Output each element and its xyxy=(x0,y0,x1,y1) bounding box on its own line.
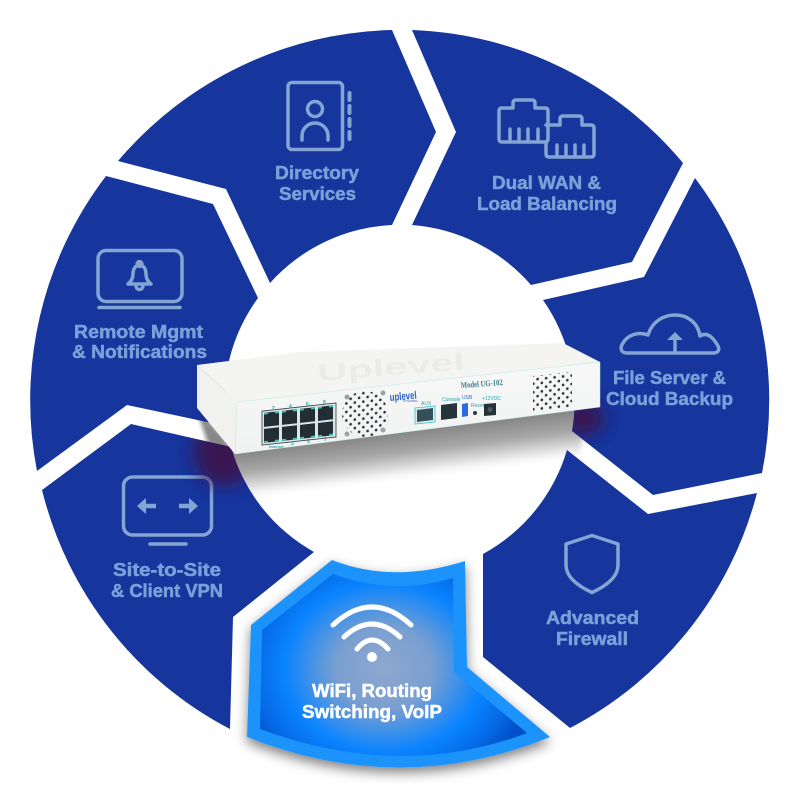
label: remote management xyxy=(72,321,207,362)
port numbers: 6 xyxy=(306,402,309,408)
device shadow on blue panels xyxy=(194,400,604,486)
right vent xyxy=(533,372,572,412)
port numbers: 7 xyxy=(324,437,327,443)
port numbers: 2 xyxy=(272,406,275,412)
left vent xyxy=(342,390,388,437)
label: advanced firewall: Firewall xyxy=(556,628,628,649)
icon: shield xyxy=(566,536,618,592)
device shadow on white xyxy=(195,403,600,525)
icon: cloud upload xyxy=(621,315,719,353)
dc jack: +12VDC xyxy=(482,396,501,402)
panel: wifi routing switching voip (highlighted) xyxy=(247,560,550,768)
aux port xyxy=(415,401,435,424)
usb port xyxy=(462,395,473,417)
label: file server: File Server & xyxy=(613,367,726,388)
label: directory services xyxy=(275,162,360,204)
device: Uplevel UG-102 appliance xyxy=(194,343,604,486)
icon: wifi xyxy=(333,607,411,662)
reset button xyxy=(471,403,485,415)
port numbers: 8 xyxy=(323,400,326,406)
console port: Console xyxy=(442,397,461,403)
usb port: USB xyxy=(462,395,473,401)
uplevel logo: uplevel xyxy=(389,390,417,404)
console port xyxy=(441,397,461,420)
ethernet ports xyxy=(262,403,336,445)
dc jack xyxy=(482,396,501,416)
uplevel logo: SYSTEMS xyxy=(403,399,417,403)
icon: laptop with bell xyxy=(98,250,182,308)
label: dual wan xyxy=(477,172,617,214)
icon: monitor with arrows xyxy=(124,477,212,544)
icon: ethernet ports xyxy=(499,100,594,157)
label: dual wan: Dual WAN & xyxy=(492,172,601,193)
label: wifi routing xyxy=(302,680,442,722)
label: file server: Cloud Backup xyxy=(606,388,733,409)
port numbers: 4 xyxy=(289,404,292,410)
label: directory services: Directory xyxy=(275,162,360,183)
label: vpn: & Client VPN xyxy=(111,580,223,601)
device top face: Uplevel xyxy=(316,348,466,387)
device top face xyxy=(197,343,600,402)
reset button: Reset xyxy=(471,403,485,409)
port numbers: 3 xyxy=(291,441,294,447)
port numbers: 5 xyxy=(307,439,310,445)
uplevel logo xyxy=(389,390,417,404)
panel: site-to-site vpn xyxy=(42,424,314,729)
label: remote management: Remote Mgmt xyxy=(74,321,203,342)
panel: remote management xyxy=(30,176,258,471)
label: advanced firewall xyxy=(546,607,639,649)
label: file server xyxy=(606,367,733,409)
panel: advanced firewall xyxy=(483,450,757,728)
panel: dual wan xyxy=(412,30,683,285)
label: dual wan: Load Balancing xyxy=(477,193,617,214)
panel: file server xyxy=(543,178,769,495)
device left side xyxy=(197,365,237,454)
label: advanced firewall: Advanced xyxy=(546,607,639,628)
icon: address book xyxy=(288,82,350,150)
port numbers xyxy=(269,400,327,449)
label: wifi routing: Switching, VoIP xyxy=(302,701,442,722)
aux port: AUX xyxy=(421,401,432,407)
label: directory services: Services xyxy=(279,183,356,204)
label: wifi routing: WiFi, Routing xyxy=(312,680,432,701)
model label: Model UG-102 xyxy=(460,377,503,390)
panel: directory services xyxy=(118,30,436,283)
port numbers: Internet xyxy=(269,444,284,449)
device front face xyxy=(235,362,600,454)
label: vpn: Site-to-Site xyxy=(113,559,221,580)
label: remote management: & Notifications xyxy=(72,341,207,362)
label: vpn xyxy=(111,559,223,601)
